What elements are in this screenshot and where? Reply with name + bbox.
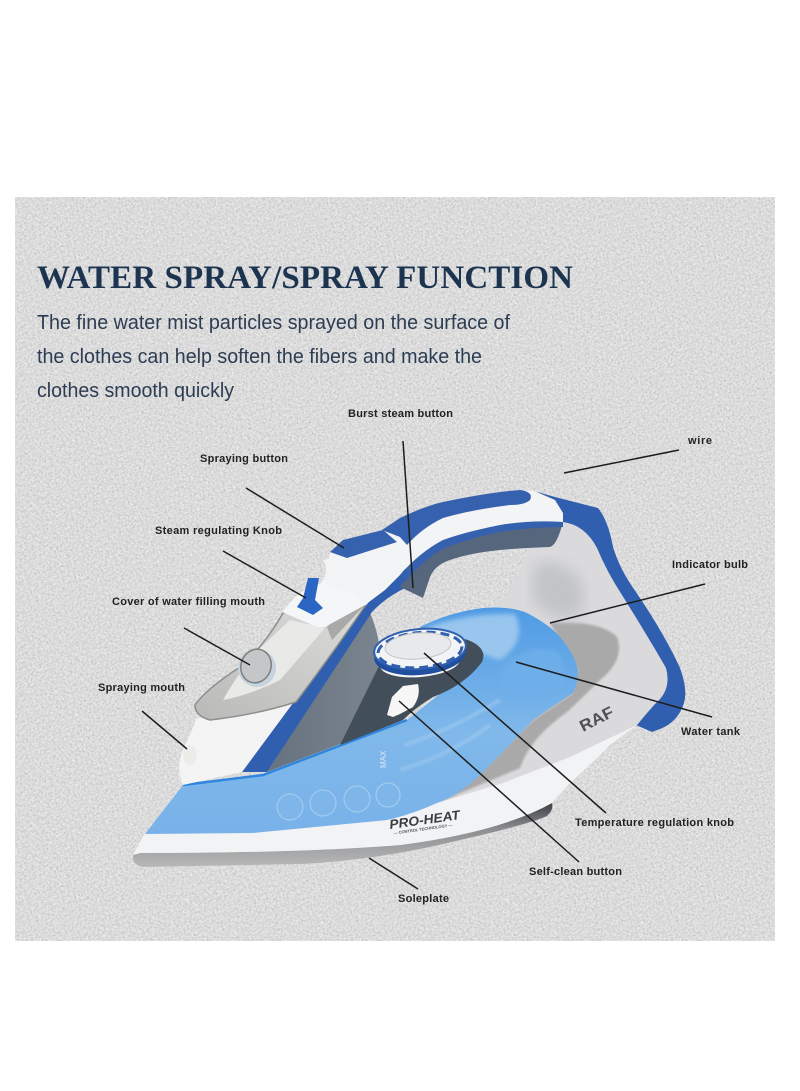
water filling cap (236, 645, 276, 687)
rear dark shading swath (437, 623, 619, 803)
RAF logo: RAF (577, 704, 617, 736)
water lid (195, 606, 365, 720)
callout labels: Spraying mouth (98, 682, 185, 694)
tank inner highlight (425, 614, 519, 660)
dark window under handle (267, 613, 403, 772)
description text: clothes smooth quickly (37, 380, 234, 402)
blue diagonal strip (242, 565, 424, 772)
lid window (223, 620, 325, 700)
callout labels (98, 408, 748, 905)
rear grey shell (430, 522, 668, 803)
soleplate plate (133, 803, 552, 867)
temperature dial (372, 625, 468, 680)
handle top grip (382, 490, 531, 545)
handle white (323, 490, 563, 605)
callout labels: Cover of water filling mouth (112, 596, 265, 608)
white nose (179, 703, 293, 785)
pictogram circles (277, 783, 400, 820)
callout labels: Indicator bulb (672, 559, 748, 571)
tank grille (500, 649, 565, 704)
spraying button (330, 530, 397, 558)
tank streaks (400, 700, 500, 770)
callout labels: Temperature regulation knob (575, 817, 734, 829)
leader lines (142, 441, 712, 889)
iron illustration (133, 490, 685, 867)
spray nozzle (183, 745, 197, 765)
water tank (145, 608, 578, 834)
callout labels: Burst steam button (348, 408, 453, 420)
PRO-HEAT logo: PRO-HEAT (388, 807, 462, 832)
callout labels: Spraying button (200, 453, 288, 465)
handle blue edge (400, 521, 563, 582)
white base band (133, 725, 637, 855)
callout labels: Steam regulating Knob (155, 525, 282, 537)
rear blue strip (520, 490, 685, 732)
column shading (532, 562, 584, 620)
PRO-HEAT logo: — CONTROL TECHNOLOGY — (393, 822, 453, 836)
handle underside (400, 522, 563, 598)
callout labels: Water tank (681, 726, 741, 738)
description text: the clothes can help soften the fibers and make the (37, 346, 482, 368)
callout labels: Self-clean button (529, 866, 622, 878)
dark dial base (340, 638, 483, 745)
title: WATER SPRAY/SPRAY FUNCTION (37, 260, 573, 296)
upper white body (320, 543, 398, 593)
knob collar (282, 583, 365, 627)
description text (37, 312, 510, 402)
self-clean button (387, 684, 419, 717)
tank top rim (183, 720, 407, 785)
callout labels: Soleplate (398, 893, 449, 905)
callout labels: wire (687, 435, 712, 447)
steam knob (297, 578, 323, 615)
panel: textured background (15, 197, 775, 941)
MAX marking: MAX (379, 750, 388, 768)
description text: The fine water mist particles sprayed on the surface of (37, 312, 510, 334)
lid dark right band (327, 598, 365, 640)
